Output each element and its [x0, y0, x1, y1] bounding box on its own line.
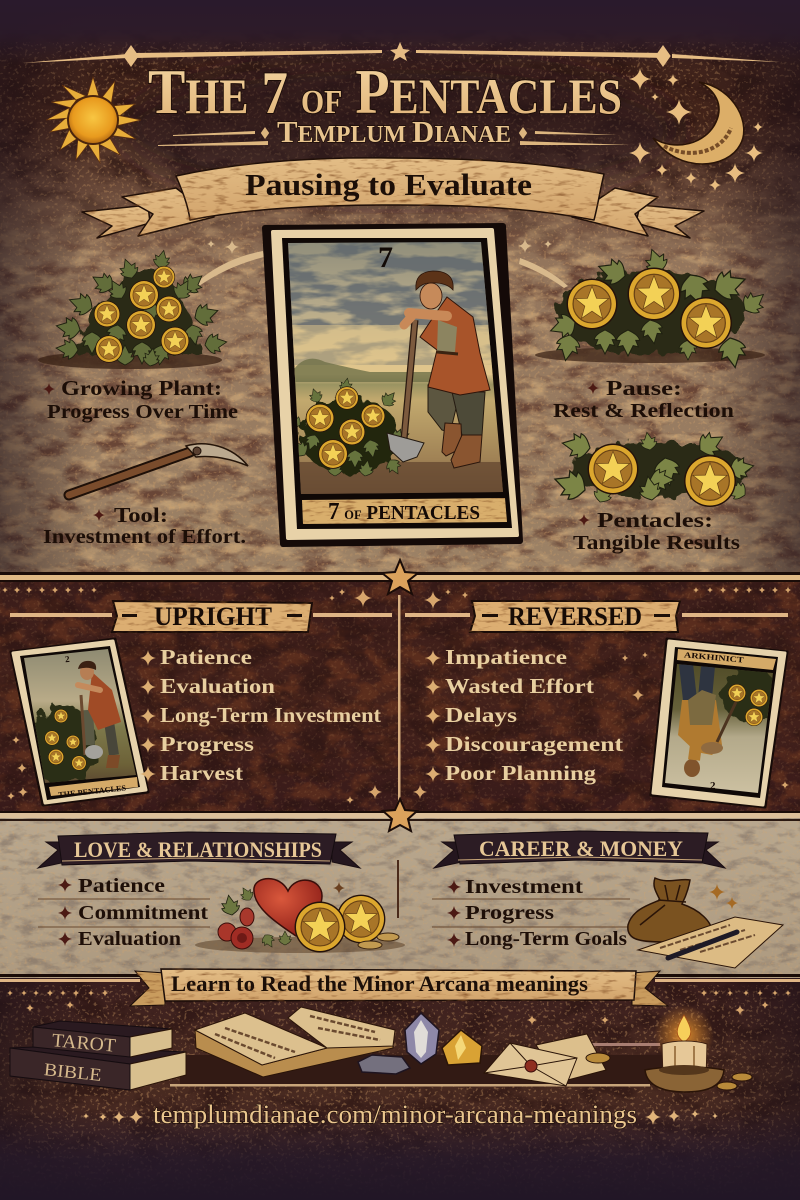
- list: reversed keywords: Poor Planning: [445, 761, 597, 785]
- ribbon banner: Pausing to Evaluate: [82, 158, 704, 238]
- banner: Love & Relationships: LOVE & RELATIONSHIPS: [74, 837, 322, 862]
- footer rule lines: [0, 974, 800, 982]
- panel: header and card area background: [0, 0, 800, 578]
- list: reversed keywords: Delays: [445, 703, 517, 727]
- text: Tool: [43, 503, 246, 548]
- list: reversed keywords: Impatience: [445, 645, 567, 669]
- divider with star: [0, 560, 800, 594]
- banner: Reversed: REVERSED: [508, 602, 642, 631]
- small card: reversed: [651, 639, 787, 807]
- list: upright keywords: Progress: [160, 732, 254, 756]
- banner: Learn to Read: Learn to Read the Minor Arcana meanings: [171, 971, 588, 996]
- icon: crescent moon with stars: [629, 68, 763, 191]
- panel: love and career parchment: [0, 814, 800, 978]
- banner: Love & Relationships: [38, 832, 360, 868]
- list: upright keywords: [140, 645, 381, 785]
- text: Pentacles: [573, 508, 740, 554]
- card picture: farmer and plant: [285, 240, 510, 498]
- list: reversed keywords: Wasted Effort: [445, 674, 594, 698]
- title: THE 7 OF PENTACLES: [148, 56, 622, 127]
- text: Growing Plant: Progress Over Time: [47, 401, 238, 423]
- list: love keywords: Evaluation: [78, 928, 181, 950]
- panel: upright and reversed: [0, 578, 800, 814]
- subtitle: Templum Dianae: [158, 114, 630, 149]
- small card: upright: [11, 639, 148, 805]
- ribbon banner: Pausing to Evaluate: Pausing to Evaluate: [245, 167, 532, 202]
- banner: Learn to Read: [130, 969, 668, 1006]
- subtitle: Templum Dianae: TEMPLUM DIANAE: [277, 114, 511, 149]
- list: career keywords: [432, 876, 630, 950]
- illustration: envelope and letter: [484, 1034, 610, 1086]
- illustration: candle: [645, 1005, 752, 1092]
- illustration: money bag and contract with pen: [628, 878, 783, 968]
- banner: Reversed: [405, 601, 788, 632]
- illustration: crystals: [358, 1013, 482, 1074]
- list: upright keywords: Long-Term Investment: [160, 703, 381, 727]
- list: reversed keywords: Discouragement: [445, 732, 623, 756]
- list: upright keywords: Patience: [160, 645, 252, 669]
- list: upright keywords: Evaluation: [160, 674, 275, 698]
- shelf with letters backdrop: [170, 1043, 670, 1086]
- list: love keywords: [38, 875, 210, 950]
- illustration: Bible book: BIBLE: [43, 1059, 103, 1085]
- main tarot card: 7 of Pentacles: [265, 226, 520, 544]
- sparkle rows: [2, 586, 792, 804]
- text: Growing Plant: [43, 376, 238, 423]
- farmer figure: [387, 271, 490, 468]
- small card: upright: THE PENTACLES: [58, 783, 127, 800]
- panel: lower dark footer: [0, 978, 800, 1200]
- illustration: two pentacles in leaves: [550, 427, 756, 507]
- top decorative rule: [22, 42, 780, 67]
- sparkle rows lower: [7, 990, 791, 1025]
- illustration: plant with pentacles: [38, 249, 228, 369]
- text: Pause: Rest & Reflection: [553, 400, 734, 422]
- divider with star 2: [0, 799, 800, 831]
- list: upright keywords: Harvest: [160, 761, 243, 785]
- icon: sun: [46, 77, 141, 163]
- card name label: 7 OF PENTACLES: [328, 499, 480, 525]
- illustration: Tarot book: TAROT: [51, 1030, 117, 1057]
- illustration: three pentacles in leaves: [535, 246, 770, 370]
- small card: upright: 2: [65, 654, 71, 664]
- banner: Career & Money: CAREER & MONEY: [479, 836, 683, 861]
- banner: Upright: UPRIGHT: [154, 602, 272, 631]
- illustration: Bible book: [10, 1046, 186, 1090]
- text: Pause: [553, 376, 734, 422]
- text: Pentacles: Pentacles:: [597, 508, 713, 532]
- list: love keywords: Patience: [78, 875, 165, 897]
- vertical divider: [397, 860, 399, 918]
- decorative arcs: [197, 239, 568, 288]
- illustration: hoe tool: [69, 444, 248, 495]
- illustration: Tarot book: [33, 1021, 172, 1057]
- banner: Upright: [10, 601, 392, 632]
- list: career keywords: Long-Term Goals: [465, 928, 627, 950]
- banner: Career & Money: [434, 831, 725, 868]
- text: Pentacles: Tangible Results: [573, 532, 740, 554]
- text: Pause: Pause:: [606, 376, 682, 400]
- list: career keywords: Progress: [465, 902, 554, 924]
- illustration: open book: [195, 1007, 395, 1077]
- small card: reversed: 2: [710, 780, 716, 792]
- main tarot card: 7 of Pentacles: 7: [378, 241, 393, 274]
- centre divider line: [398, 595, 400, 803]
- text: Tool: Investment of Effort.: [43, 526, 246, 548]
- text: Tool: Tool:: [114, 503, 168, 527]
- illustration: heart with coins and roses: [195, 879, 405, 953]
- list: love keywords: Commitment: [78, 902, 208, 924]
- footer URL: templumdianae.com/minor-arcana-meanings: [153, 1100, 637, 1129]
- list: career keywords: Investment: [465, 876, 583, 898]
- small card: reversed: ARKHINICT: [684, 650, 745, 665]
- text: Growing Plant: Growing Plant:: [61, 376, 222, 400]
- list: reversed keywords: [425, 645, 623, 785]
